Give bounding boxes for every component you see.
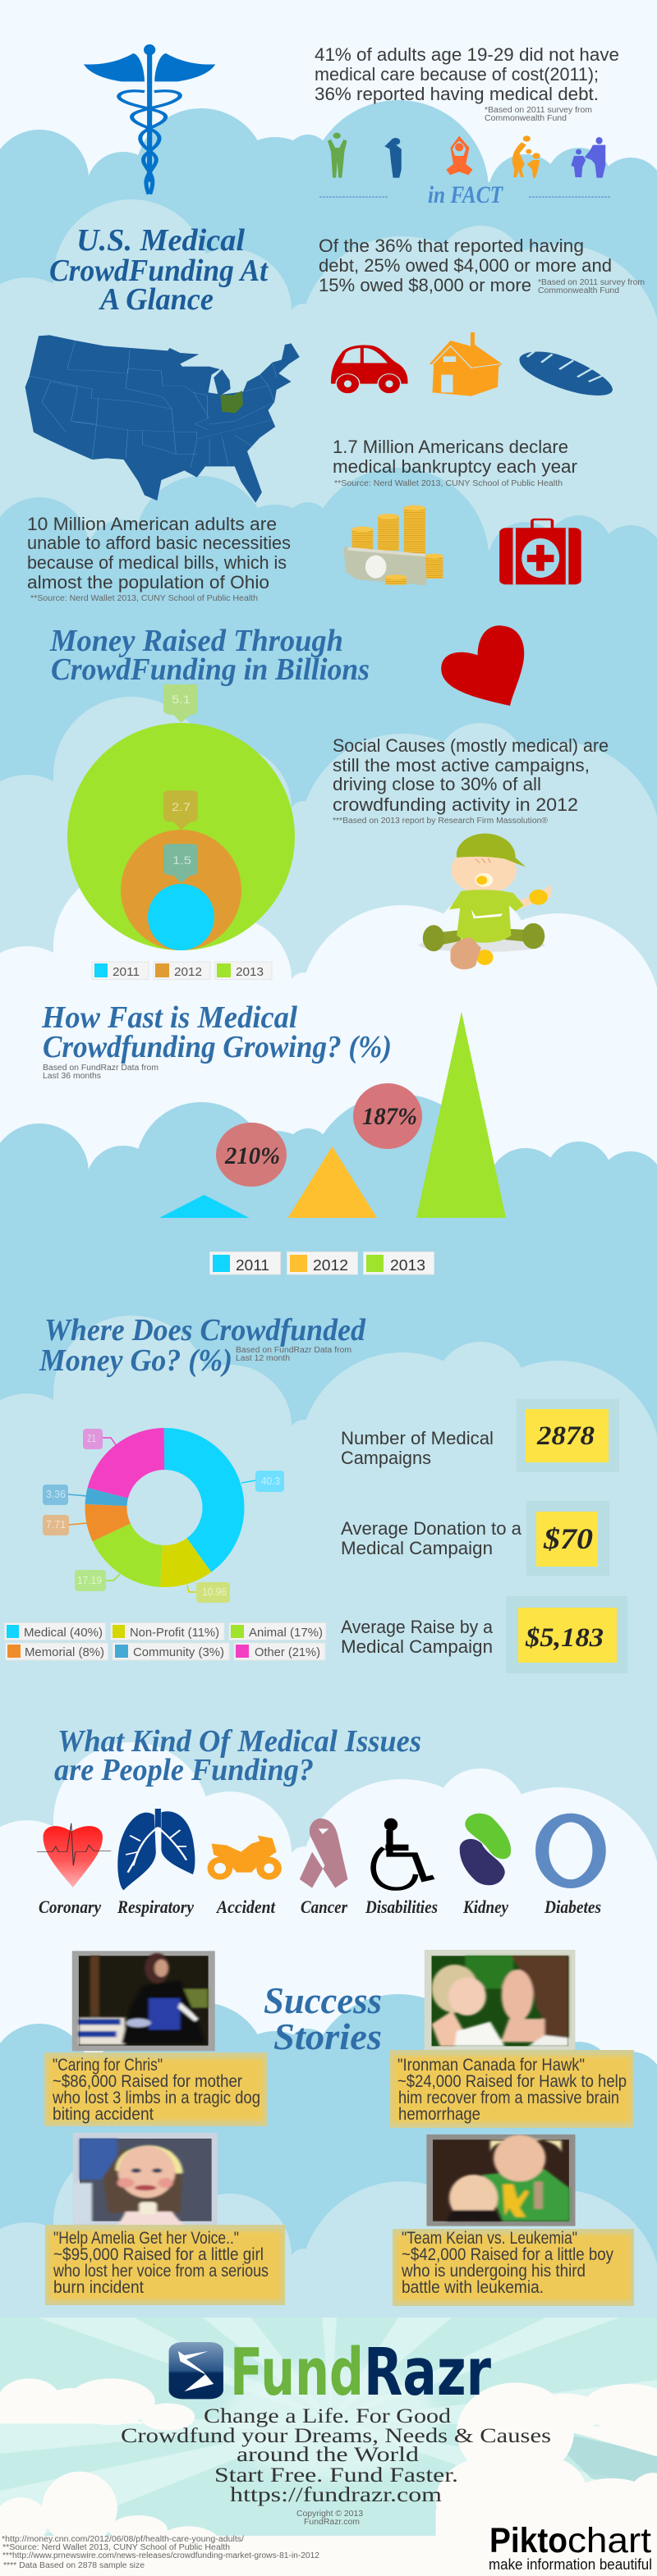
text: copyright: Copyright © 2013 — [296, 2510, 363, 2519]
callout 187%: 187% — [362, 1103, 417, 1130]
text: FundRazr tagline: https://fundrazr.com — [230, 2484, 443, 2506]
map: United States with Ohio highlighted — [25, 335, 300, 503]
heading: how fast: Crowdfunding Growing? (%) — [43, 1030, 392, 1064]
label 40.3 — [241, 1471, 284, 1492]
text: basic necessities: 10 Million American adults are — [27, 514, 277, 534]
text: social causes: crowdfunding activity in 2012 — [333, 794, 578, 815]
label 21 — [83, 1429, 117, 1449]
icons: people silhouettes — [328, 133, 605, 178]
stat: average donation: Medical Campaign — [341, 1538, 493, 1558]
text: copyright — [296, 2510, 363, 2527]
logo: Piktochart — [489, 2521, 652, 2573]
stat: average raise: $5,183 — [525, 1623, 604, 1653]
caption: Ironman Canada for Hawk — [389, 2050, 634, 2128]
text: social causes: Social Causes (mostly medical) are — [333, 735, 609, 756]
text: copyright: FundRazr.com — [304, 2518, 360, 2527]
text: basic necessities: **Source: Nerd Wallet 2013, CUNY School of Public Health — [30, 594, 258, 603]
caption: Help Amelia Get her Voice: ~$95,000 Raised for a little girl — [53, 2245, 264, 2264]
stat: average donation: Average Donation to a — [341, 1518, 522, 1539]
text: debt amounts: debt, 25% owed $4,000 or more and — [319, 255, 612, 276]
heading: money raised: Money Raised Through — [49, 624, 343, 658]
heading: how fast — [41, 1000, 392, 1081]
text: adults without medical care: medical care because of cost(2011); — [315, 64, 599, 85]
icon labels: Diabetes — [544, 1897, 601, 1917]
icon: caduceus — [84, 44, 215, 194]
icon: saluting soldier — [384, 138, 402, 178]
heading: medical issues — [54, 1724, 421, 1787]
legend: growth: 2011 — [236, 1257, 269, 1274]
stat: average donation — [341, 1501, 609, 1576]
footer panel — [0, 2317, 657, 2576]
legend: donut chart: Animal (17%) — [249, 1626, 323, 1640]
legend: bubble chart: 2012 — [174, 965, 202, 979]
legend: growth — [210, 1252, 434, 1274]
text: bankruptcy: medical bankruptcy each year — [333, 456, 577, 477]
logo: FundRazr: Fund — [230, 2335, 364, 2410]
caption: Ironman Canada for Hawk: him recover from a massive brain — [398, 2089, 619, 2107]
icon: yoga figure — [446, 136, 473, 175]
icon labels: Cancer — [301, 1897, 347, 1917]
text: social causes: ***Based on 2013 report by Research Firm Massolution® — [333, 817, 549, 826]
icon: lungs — [117, 1809, 195, 1890]
legend: donut chart — [5, 1623, 326, 1660]
label 17.19 — [75, 1570, 120, 1591]
callout 210% — [216, 1123, 287, 1187]
caption: Ironman Canada for Hawk: hemorrhage — [398, 2105, 480, 2124]
text: sources — [2, 2535, 319, 2570]
text: basic necessities — [27, 514, 291, 603]
stat: number of campaigns: 2878 — [536, 1421, 595, 1451]
icon: kidney — [460, 1814, 511, 1885]
icon: green man — [328, 133, 347, 178]
heading: how fast: How Fast is Medical — [41, 1000, 297, 1035]
heading: how fast: Last 36 months — [43, 1072, 101, 1081]
legend: bubble chart — [92, 962, 272, 980]
triangle 2011 — [159, 1195, 250, 1218]
triangle 2013 — [416, 1012, 506, 1218]
heading: US medical crowdfunding: CrowdFunding At — [49, 254, 269, 288]
heading: where does money go: Where Does Crowdfunded — [44, 1313, 366, 1347]
text: debt amounts: Commonwealth Fund — [538, 286, 619, 295]
text: debt amounts: Of the 36% that reported having — [319, 236, 584, 256]
text: debt amounts — [319, 236, 645, 295]
icon labels: Coronary — [39, 1897, 101, 1917]
callout 210%: 210% — [224, 1142, 280, 1169]
heading: success stories: Stories — [273, 2016, 382, 2057]
icon labels — [39, 1897, 601, 1917]
text: sources: **Source: Nerd Wallet 2013, CUNY School of Public Health — [2, 2543, 230, 2552]
caption: Team Keian vs. Leukemia: ~$42,000 Raised for a little boy — [402, 2245, 613, 2264]
icon: heart — [441, 625, 524, 706]
label 7.71 — [43, 1515, 87, 1535]
label 2.7: 2.7 — [172, 800, 191, 813]
legend: donut chart: Memorial (8%) — [25, 1645, 104, 1659]
logo mark — [169, 2342, 223, 2399]
icon labels: Accident — [215, 1897, 276, 1917]
logo: FundRazr: Razr — [364, 2335, 491, 2410]
stat: average raise: Medical Campaign — [341, 1636, 493, 1657]
heading: success stories: Success — [264, 1979, 382, 2021]
label 2.7 — [163, 790, 198, 830]
heading: where does money go: Money Go? (%) — [39, 1343, 232, 1378]
text: FundRazr tagline — [121, 2405, 551, 2506]
text: basic necessities: almost the population of Ohio — [27, 572, 269, 593]
caption: Team Keian vs. Leukemia: "Team Keian vs. Leukemia" — [402, 2229, 577, 2248]
callout 187% — [353, 1083, 422, 1149]
caption: Ironman Canada for Hawk: ~$24,000 Raised for Hawk to help — [397, 2072, 627, 2091]
caption: Team Keian vs. Leukemia: battle with leukemia. — [402, 2278, 544, 2297]
in FACT divider: in FACT — [428, 181, 503, 208]
heading: US medical crowdfunding — [49, 223, 269, 317]
caption: Help Amelia Get her Voice — [45, 2225, 285, 2305]
caption: Caring for Chris: "Caring for Chris" — [53, 2056, 163, 2075]
photo: Help Amelia Get her Voice — [73, 2133, 218, 2226]
caption: Caring for Chris: ~$86,000 Raised for mother — [53, 2072, 242, 2091]
Ohio state — [220, 391, 243, 413]
label 1.5: 1.5 — [172, 853, 191, 867]
bubble chart: money raised — [67, 684, 295, 950]
caption: Help Amelia Get her Voice: who lost her voice from a serious — [53, 2262, 269, 2281]
footer clouds — [0, 2378, 657, 2576]
text: FundRazr tagline: Crowdfund your Dreams, Needs & Causes — [121, 2425, 551, 2447]
heading: medical issues: are People Funding? — [54, 1753, 314, 1787]
heading: medical issues: What Kind Of Medical Issues — [57, 1724, 421, 1759]
text: debt amounts: *Based on 2011 survey from — [538, 278, 645, 287]
icon: wheelchair — [374, 1819, 434, 1889]
bubble 2013 — [67, 723, 295, 950]
stat: number of campaigns: Campaigns — [341, 1448, 431, 1468]
icon row: medical issues — [37, 1809, 601, 1917]
heading: money raised: CrowdFunding in Billions — [51, 652, 370, 687]
text: social causes: driving close to 30% of all — [333, 774, 541, 794]
label 7.71: 7.71 — [46, 1518, 66, 1531]
text: adults without medical care: 41% of adults age 19-29 did not have — [315, 44, 619, 65]
icon: diabetes ring — [542, 1818, 600, 1884]
icon: motorcycle — [208, 1836, 282, 1880]
heading: where does money go: Based on FundRazr Data from — [236, 1346, 351, 1355]
bubble 2011 — [148, 884, 214, 950]
caption: Caring for Chris — [44, 2052, 267, 2126]
icon: car — [331, 345, 408, 394]
legend: donut chart: Other (21%) — [255, 1645, 320, 1659]
text: sources: *http://money.cnn.com/2012/06/08/pf/health-care-young-adults/ — [2, 2535, 244, 2544]
caption: Team Keian vs. Leukemia — [393, 2229, 634, 2306]
icon labels: Kidney — [462, 1897, 508, 1917]
photo: Ironman Canada for Hawk — [425, 1950, 576, 2050]
text: sources: **** Data Based on 2878 sample size — [3, 2561, 145, 2570]
heading: success stories — [264, 1979, 382, 2057]
label 17.19: 17.19 — [77, 1574, 102, 1586]
logo: Piktochart: Pikto — [489, 2521, 567, 2560]
stat: number of campaigns — [341, 1399, 619, 1472]
text: bankruptcy: 1.7 Million Americans declare — [333, 437, 568, 457]
text: basic necessities: because of medical bills, which is — [27, 552, 287, 573]
heading: US medical crowdfunding: U.S. Medical — [76, 223, 245, 258]
logo: FundRazr — [169, 2335, 491, 2410]
stat: average raise — [341, 1596, 627, 1673]
caption: Caring for Chris: biting accident — [53, 2105, 154, 2124]
text: sources: ***http://www.prnewswire.com/news-releases/crowdfunding-market-grows-81-in-2012 — [2, 2551, 319, 2560]
caption: Help Amelia Get her Voice: burn incident — [53, 2278, 144, 2297]
stat: average donation: $70 — [543, 1522, 593, 1555]
label 10.96 — [187, 1582, 230, 1603]
label 40.3: 40.3 — [261, 1475, 280, 1487]
icon labels: Respiratory — [117, 1897, 194, 1917]
text: debt amounts: 15% owed $8,000 or more — [319, 275, 531, 295]
bubble 2012 — [121, 830, 241, 950]
stat: average raise: Average Raise by a — [341, 1617, 494, 1637]
text: basic necessities: unable to afford basic necessities — [27, 533, 291, 553]
icon: house — [430, 332, 502, 396]
label 10.96: 10.96 — [202, 1585, 227, 1598]
caption: Caring for Chris: who lost 3 limbs in a tragic dog — [52, 2089, 260, 2107]
label 3.36: 3.36 — [46, 1488, 66, 1500]
heading: how fast: Based on FundRazr Data from — [43, 1064, 159, 1073]
icon: mother and child — [512, 135, 540, 178]
legend: growth: 2013 — [390, 1257, 425, 1274]
label 3.36 — [43, 1485, 87, 1505]
text: FundRazr tagline: Start Free. Fund Faster. — [214, 2464, 458, 2487]
text: adults without medical care — [315, 44, 619, 123]
stat: number of campaigns: Number of Medical — [341, 1428, 494, 1448]
logo: Piktochart: chart — [567, 2521, 651, 2560]
label 5.1: 5.1 — [172, 693, 191, 706]
label 5.1 — [163, 684, 198, 723]
label 1.5 — [163, 844, 198, 883]
label 21: 21 — [87, 1432, 96, 1444]
legend: donut chart: Community (3%) — [133, 1645, 224, 1659]
triangle chart: growth — [159, 1012, 506, 1218]
text: adults without medical care: Commonwealth Fund — [485, 114, 567, 123]
legend: bubble chart: 2013 — [236, 965, 264, 979]
legend: bubble chart: 2011 — [113, 965, 140, 979]
text: adults without medical care: *Based on 2011 survey from — [485, 106, 592, 115]
heading: money raised — [49, 624, 370, 687]
heading: where does money go — [39, 1313, 366, 1378]
icon: baby with baseball — [419, 834, 551, 969]
caption: Help Amelia Get her Voice: "Help Amelia Get her Voice.." — [53, 2229, 239, 2248]
icon: bread — [519, 351, 613, 396]
icon: father and child — [571, 137, 605, 178]
heading: where does money go: Last 12 month — [236, 1354, 290, 1363]
legend: donut chart: Non-Profit (11%) — [130, 1626, 219, 1640]
triangle 2012 — [287, 1146, 377, 1218]
text: bankruptcy: **Source: Nerd Wallet 2013, CUNY School of Public Health — [334, 479, 563, 488]
icon: coronary heart — [37, 1823, 111, 1887]
icon: medical kit — [499, 519, 581, 584]
text: social causes — [333, 735, 609, 826]
text: FundRazr tagline: around the World — [237, 2444, 420, 2466]
logo: Piktochart: make information beautiful — [489, 2556, 652, 2573]
photo: Team Keian vs. Leukemia — [426, 2134, 576, 2226]
donut chart: destination of funds — [43, 1429, 284, 1603]
photo: Caring for Chris — [72, 1951, 215, 2051]
text: social causes: still the most active campaigns, — [333, 755, 590, 776]
caption: Team Keian vs. Leukemia: who is undergoing his third — [401, 2262, 586, 2281]
icon: awareness ribbon — [300, 1819, 347, 1888]
heading: US medical crowdfunding: A Glance — [99, 282, 214, 317]
text: FundRazr tagline: Change a Life. For Good — [204, 2405, 452, 2427]
icon labels: Disabilities — [365, 1897, 438, 1917]
legend: donut chart: Medical (40%) — [24, 1626, 103, 1640]
legend: growth: 2012 — [313, 1257, 348, 1274]
text: adults without medical care: 36% reported having medical debt. — [315, 84, 599, 104]
text: bankruptcy — [333, 437, 577, 488]
caption: Ironman Canada for Hawk: "Ironman Canada for Hawk" — [397, 2056, 585, 2075]
icon: coins and money — [343, 506, 443, 585]
